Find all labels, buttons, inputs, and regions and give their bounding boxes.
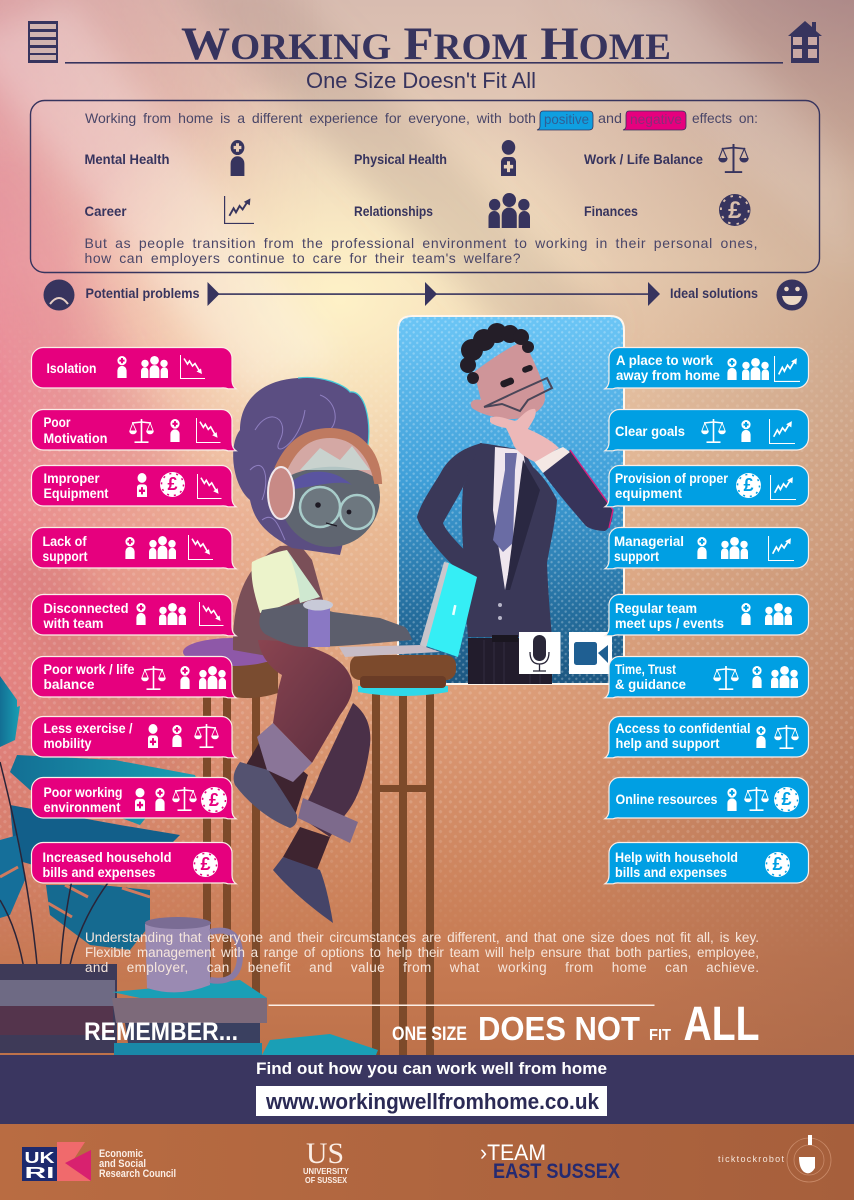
item: relationships: Relationships [354, 203, 433, 219]
footer band [0, 1124, 854, 1200]
pill: time trust guidance: & guidance [615, 677, 686, 692]
logo: University of Sussex: US [306, 1137, 344, 1170]
closing question: But as people transition from the professional environment to working in their personal ones, [84, 235, 758, 251]
pill: online resources: Online resources [616, 792, 718, 807]
icon: house [788, 21, 822, 63]
pill: poor working environment: Poor working [44, 785, 122, 800]
item: mental health [84, 140, 244, 176]
item: finances: £ [728, 197, 742, 224]
label: ideal solutions: Ideal solutions [670, 285, 758, 301]
pill: confidential help: help and support [616, 736, 720, 751]
pill: help with household bills: £ [772, 854, 783, 874]
pill: increased household bills: £ [200, 854, 211, 874]
label: potential problems: Potential problems [86, 285, 200, 301]
closing paragraph: and employer, can benefit and value from what working from home can achieve. [85, 960, 759, 975]
icon: sad face [44, 280, 74, 310]
slogan: ONE SIZE [392, 1024, 467, 1045]
pill: help with household bills [605, 842, 808, 884]
intro sentence: positive [544, 111, 589, 127]
pill: disconnected with team: Disconnected [44, 601, 128, 616]
icon: office building [28, 21, 58, 63]
pill: poor work life balance: balance [44, 677, 95, 692]
intro sentence [85, 110, 758, 130]
pill: isolation [31, 347, 236, 389]
logo: Team East Sussex [480, 1140, 620, 1183]
pill: managerial support: support [614, 549, 659, 564]
pill: disconnected with team: with team [43, 616, 104, 631]
pill: poor working environment: environment [44, 800, 121, 815]
slogan: FIT [649, 1027, 671, 1044]
item: work life balance [584, 144, 749, 172]
pill: poor motivation [31, 409, 236, 451]
pill: poor working environment [31, 777, 236, 819]
solution pills [605, 347, 808, 884]
pill: lack of support [31, 527, 236, 569]
arrow: problems to solutions [44, 280, 808, 310]
closing question: how can employers continue to care for their team's welfare? [84, 250, 521, 266]
item: career [84, 196, 254, 223]
logo: UKRI ESRC [22, 1142, 176, 1182]
pill: online resources [605, 777, 808, 819]
slogan: DOES NOT [478, 1010, 640, 1047]
pill: provision of proper equipment: £ [743, 475, 754, 495]
pill: poor work life balance [31, 656, 236, 698]
item: physical health: Physical Health [354, 151, 447, 167]
pill: isolation: Isolation [46, 361, 96, 376]
pill: provision of proper equipment: Provision of proper [615, 471, 729, 486]
pill: poor motivation: Poor [44, 415, 71, 430]
pill: clear goals: Clear goals [615, 424, 685, 439]
pill: increased household bills: Increased household [42, 850, 172, 865]
pill: lack of support: support [42, 549, 88, 564]
pill: confidential help: Access to confidential [616, 721, 750, 736]
pill: poor working environment: £ [209, 790, 219, 810]
intro sentence: and [598, 110, 622, 126]
pill: a place to work away from home [605, 347, 808, 389]
call to action band [0, 1055, 854, 1124]
pill: online resources: £ [781, 789, 792, 809]
pill: less exercise mobility: mobility [44, 736, 92, 751]
pill: provision of proper equipment: equipment [615, 486, 682, 501]
logo: Team East Sussex: EAST SUSSEX [493, 1160, 620, 1183]
item: physical health [354, 140, 516, 176]
item: finances: Finances [584, 203, 638, 219]
pill: regular team meet ups: Regular team [615, 601, 697, 616]
closing paragraph: Flexible management with a range of options to help their team will help ensure that both parties, employee, [85, 945, 759, 960]
illustration: laptop [339, 562, 477, 657]
closing paragraph [85, 930, 759, 975]
subtitle: One Size Doesn't Fit All [306, 68, 536, 93]
pill: time trust guidance: Time, Trust [615, 662, 676, 677]
item: mental health: Mental Health [84, 151, 170, 167]
pill: improper equipment: Improper [44, 471, 100, 486]
logo: UKRI ESRC: and Social [99, 1158, 146, 1170]
illustration: woman [233, 377, 412, 923]
pill: help with household bills: Help with household [615, 850, 738, 865]
icon: video button [569, 632, 612, 674]
pill: disconnected with team [31, 594, 236, 636]
pill: increased household bills [31, 842, 236, 884]
item: finances [584, 194, 750, 226]
remember heading: REMEMBER... [84, 1018, 238, 1046]
pill: regular team meet ups [605, 594, 808, 636]
pill: time trust guidance [605, 656, 808, 698]
closing paragraph: Understanding that everyone and their circumstances are different, and that one size does not fit all, is key. [85, 930, 759, 945]
logo: UKRI ESRC: UK [24, 1150, 55, 1167]
pill: managerial support: Managerial [614, 534, 684, 549]
slogan [392, 998, 760, 1051]
pill: help with household bills: bills and expenses [615, 865, 727, 880]
pill: provision of proper equipment [605, 465, 808, 507]
remember rule [268, 1004, 654, 1006]
pill: improper equipment: £ [167, 474, 178, 494]
logo: UKRI ESRC: Economic [99, 1148, 143, 1160]
pill: managerial support [605, 527, 808, 569]
pill: a place to work away from home: A place to work [616, 353, 713, 368]
intro sentence: Working from home is a different experience for everyone, with both [85, 110, 536, 126]
logo: University of Sussex: UNIVERSITY [303, 1167, 350, 1176]
title: WORKING FROM HOME [181, 18, 671, 70]
logo: ticktockrobot: ticktockrobot [718, 1154, 784, 1164]
logo: UKRI ESRC: RI [24, 1165, 54, 1182]
logo: University of Sussex [303, 1137, 350, 1185]
pill: less exercise mobility [31, 716, 236, 758]
pill: poor motivation: Motivation [44, 431, 108, 446]
panel: introduction [30, 100, 820, 272]
slogan: ALL [684, 998, 760, 1051]
icon: microphone button [519, 632, 560, 674]
intro sentence: effects on: [692, 110, 758, 126]
logo: University of Sussex: OF SUSSEX [305, 1176, 348, 1185]
item: work life balance: Work / Life Balance [584, 151, 703, 167]
pill: lack of support: Lack of [42, 534, 87, 549]
pill: clear goals [605, 409, 808, 451]
logo: ticktockrobot [718, 1135, 831, 1182]
icon: happy face [776, 280, 808, 310]
illustration: video call panel [397, 315, 624, 684]
illustration: plant pot [0, 964, 117, 1053]
pill: confidential help [605, 716, 808, 758]
logo: Team East Sussex: ›TEAM [480, 1140, 546, 1165]
illustration: man [417, 323, 613, 684]
problem pills [31, 347, 236, 884]
illustration: books and mug [112, 917, 378, 1055]
pill: less exercise mobility: Less exercise / [44, 721, 133, 736]
logo: UKRI ESRC: Research Council [99, 1168, 176, 1180]
intro sentence: negative [630, 111, 682, 127]
pill: a place to work away from home: away from home [616, 368, 720, 383]
closing question [84, 235, 758, 266]
pill: increased household bills: bills and expenses [42, 865, 156, 880]
call to action text: Find out how you can work well from home [256, 1059, 607, 1078]
item: relationships [354, 193, 530, 228]
pill: poor work life balance: Poor work / life [44, 662, 135, 677]
illustration: stools [183, 638, 456, 1055]
illustration: plant [0, 676, 198, 975]
pill: regular team meet ups: meet ups / events [615, 616, 724, 631]
website address: www.workingwellfromhome.co.uk [265, 1089, 600, 1114]
pill: improper equipment [31, 465, 236, 507]
item: career: Career [84, 203, 127, 219]
pill: improper equipment: Equipment [44, 486, 109, 501]
